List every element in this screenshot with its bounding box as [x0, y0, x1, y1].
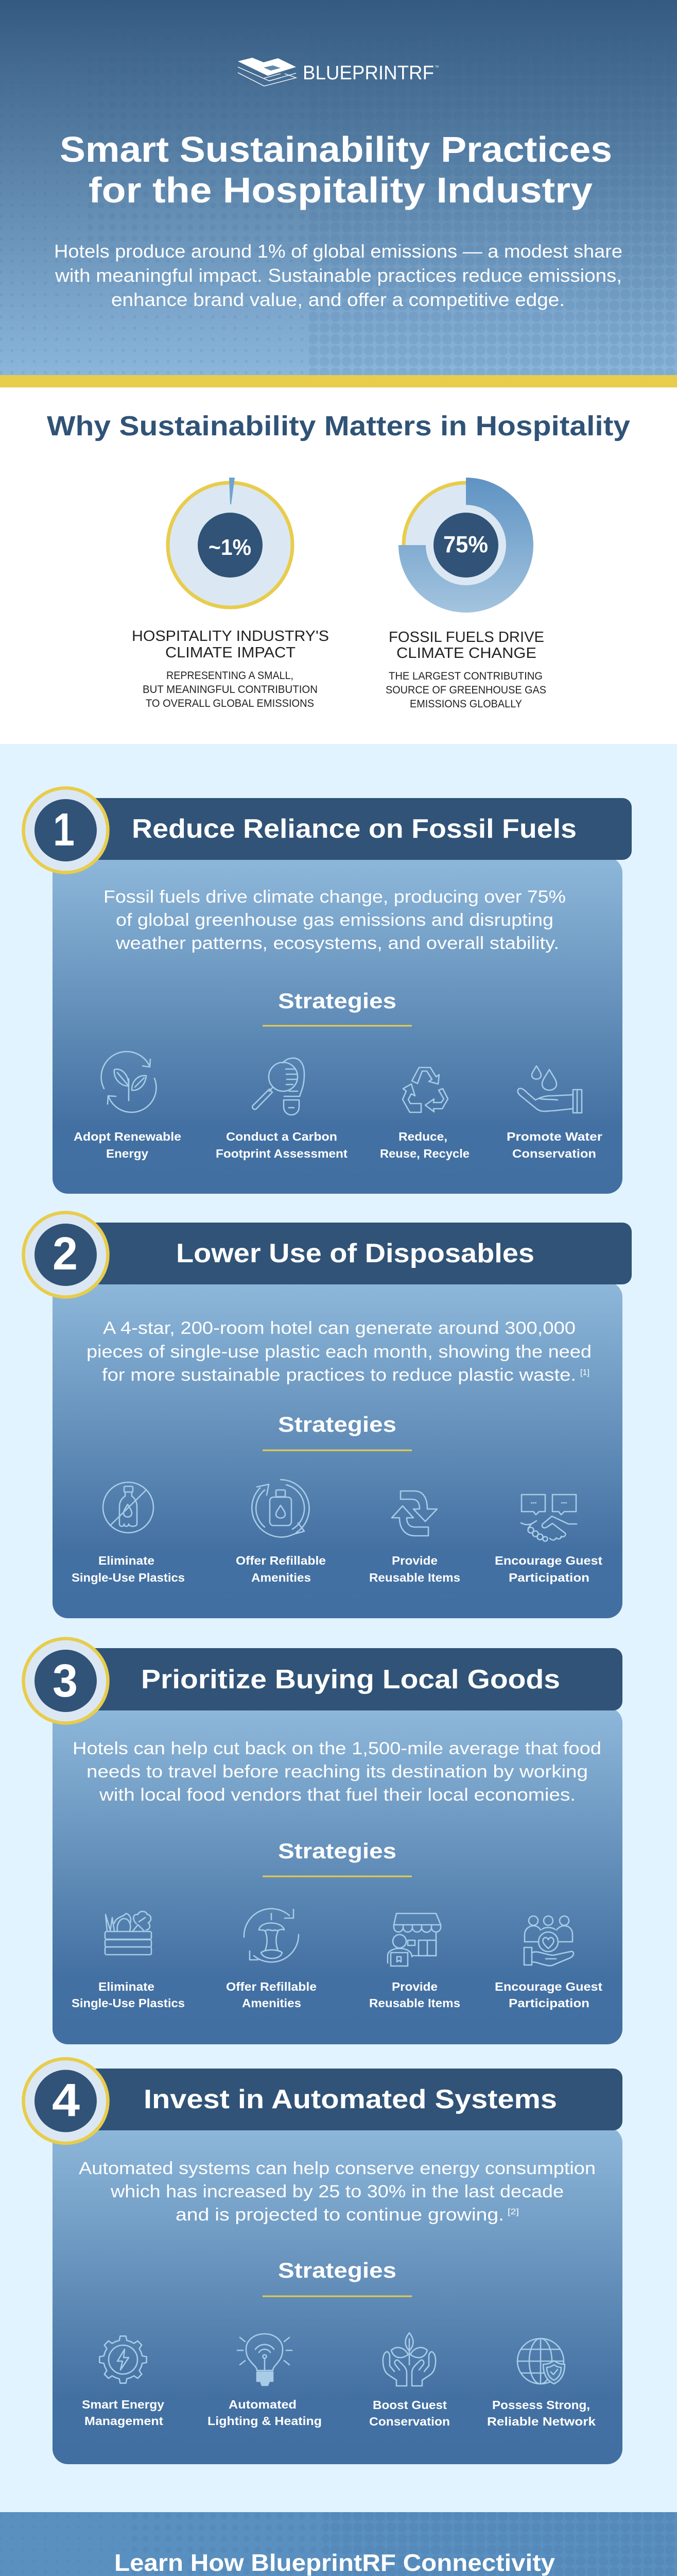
- heading: Reduce Reliance on Fossil Fuels: [132, 814, 577, 844]
- stat text: fossil fuels: EMISSIONS GLOBALLY: [410, 698, 522, 710]
- strategy labels: Management: [84, 2414, 163, 2428]
- header bar: [77, 798, 632, 860]
- section heading: Why Sustainability Matters in Hospitality: [47, 411, 630, 442]
- body text: and is projected to continue growing.: [176, 2205, 504, 2225]
- panel: call to action: [0, 2512, 677, 2576]
- strategy labels: Boost Guest: [373, 2398, 447, 2412]
- header bar: [77, 1648, 622, 1710]
- strategies heading: Strategies: [278, 2258, 396, 2282]
- icon: guest participation: [521, 1495, 577, 1541]
- stat text: fossil fuels: SOURCE OF GREENHOUSE GAS: [386, 684, 546, 696]
- body text: Hotels can help cut back on the 1,500-mile average that food: [73, 1739, 601, 1758]
- intro text: with meaningful impact. Sustainable practices reduce emissions,: [55, 265, 622, 286]
- body text: for more sustainable practices to reduce plastic waste.: [102, 1365, 576, 1385]
- stat text: climate impact: BUT MEANINGFUL CONTRIBUTION: [143, 684, 318, 696]
- body text: weather patterns, ecosystems, and overall stability.: [115, 934, 559, 953]
- strategy labels: Footprint Assessment: [216, 1147, 348, 1160]
- heading: Invest in Automated Systems: [144, 2084, 557, 2114]
- strategy labels: Conduct a Carbon: [226, 1130, 337, 1143]
- strategy labels: Reduce,: [398, 1130, 447, 1143]
- stat text: fossil fuels: THE LARGEST CONTRIBUTING: [389, 670, 543, 682]
- strategy labels: Possess Strong,: [492, 2398, 590, 2412]
- strategy labels: [72, 1554, 602, 1584]
- number badge: [24, 788, 108, 873]
- icon: local storefront: [388, 1913, 441, 1966]
- body text: [86, 1318, 592, 1385]
- icon: no plastic bottle: [103, 1482, 153, 1533]
- stat text: climate impact: [132, 628, 329, 709]
- donut chart: 75%: [398, 478, 533, 613]
- body text: with local food vendors that fuel their local economies.: [99, 1785, 576, 1805]
- number badge: 1: [53, 804, 75, 856]
- practices background: [0, 744, 677, 2512]
- strategy labels: Conservation: [369, 2415, 450, 2428]
- intro text: Hotels produce around 1% of global emissions — a modest share: [54, 241, 622, 262]
- body text: Automated systems can help conserve energy consumption: [79, 2159, 596, 2178]
- icon: apple core cycle: [244, 1909, 299, 1962]
- strategy labels: Provide: [392, 1980, 438, 1993]
- number badge: 4: [52, 2075, 80, 2126]
- body text: A 4-star, 200-room hotel can generate around 300,000: [103, 1318, 576, 1338]
- strategy labels: Single-Use Plastics: [72, 1996, 185, 2010]
- icon: recycle: [403, 1067, 448, 1112]
- card: [53, 857, 622, 1194]
- body text: Fossil fuels drive climate change, producing over 75%: [103, 887, 566, 907]
- strategy labels: Amenities: [242, 1996, 301, 2010]
- strategies heading: Strategies: [278, 1839, 396, 1863]
- strategy labels: Automated: [229, 2398, 297, 2411]
- panel: practice 2: [24, 1213, 632, 1618]
- body text: [1]: [580, 1368, 589, 1377]
- body text: [103, 887, 566, 953]
- strategies heading: Strategies: [278, 1412, 396, 1436]
- stat text: climate impact: CLIMATE IMPACT: [165, 645, 296, 661]
- number badge: 3: [53, 1655, 78, 1707]
- strategies heading: Strategies: [278, 989, 396, 1013]
- logo: [238, 58, 439, 86]
- panel: practice 4: [24, 2059, 622, 2464]
- number badge: [24, 1213, 108, 1297]
- logo: TM: [435, 65, 439, 69]
- icon: renewable energy: [101, 1052, 156, 1112]
- strategy labels: Reuse, Recycle: [380, 1147, 470, 1160]
- strategy labels: Conservation: [512, 1147, 596, 1160]
- strategy labels: Lighting & Heating: [207, 2414, 322, 2428]
- icon: footprint assessment: [252, 1058, 304, 1115]
- header bar: [77, 2069, 622, 2130]
- card: [53, 2127, 622, 2464]
- icon: conservation hands: [383, 2333, 436, 2386]
- body text: pieces of single-use plastic each month, showing the need: [86, 1342, 592, 1362]
- donut chart: 75%: 75%: [443, 531, 488, 557]
- strategy labels: [74, 1130, 602, 1160]
- logo: BLUEPRINTRF: [303, 62, 434, 84]
- strategy labels: Adopt Renewable: [74, 1130, 181, 1143]
- strategy labels: Promote Water: [507, 1130, 602, 1143]
- body text: needs to travel before reaching its destination by working: [86, 1762, 588, 1782]
- stat text: climate impact: REPRESENTING A SMALL,: [166, 670, 293, 682]
- strategy labels: Smart Energy: [82, 2398, 164, 2411]
- panel: why sustainability matters: [0, 387, 677, 744]
- number badge: [24, 2059, 108, 2143]
- strategy labels: Amenities: [251, 1571, 311, 1584]
- donut chart: 1%: [168, 478, 292, 607]
- body text: which has increased by 25 to 30% in the last decade: [110, 2182, 564, 2201]
- stat text: fossil fuels: [386, 629, 546, 710]
- icon: water conservation: [518, 1066, 582, 1113]
- icon: refillable amenity: [252, 1480, 309, 1537]
- body text: [2]: [508, 2208, 519, 2216]
- strategy labels: Participation: [509, 1571, 589, 1584]
- header bar: [77, 1223, 632, 1284]
- stat text: fossil fuels: CLIMATE CHANGE: [396, 645, 536, 662]
- strategy labels: Participation: [509, 1996, 589, 2010]
- donut chart: 1%: ~1%: [209, 535, 251, 560]
- stat text: fossil fuels: FOSSIL FUELS DRIVE: [389, 629, 544, 646]
- panel: practice 3: [24, 1638, 622, 2044]
- stat text: climate impact: TO OVERALL GLOBAL EMISSIONS: [146, 698, 314, 709]
- icon: reusable arrows: [392, 1491, 437, 1536]
- icon: secure network globe: [517, 2338, 565, 2384]
- heading: Prioritize Buying Local Goods: [141, 1665, 560, 1694]
- cta heading: Learn How BlueprintRF Connectivity: [114, 2549, 555, 2576]
- strategy labels: Reliable Network: [487, 2415, 596, 2428]
- stat text: climate impact: HOSPITALITY INDUSTRY'S: [132, 628, 329, 645]
- yellow divider band: [0, 375, 677, 387]
- heading: Lower Use of Disposables: [176, 1239, 534, 1268]
- strategy labels: Offer Refillable: [226, 1980, 317, 1993]
- icon: community care: [524, 1916, 574, 1965]
- icon: smart energy gear: [99, 2336, 147, 2383]
- card: [53, 1282, 622, 1618]
- strategy labels: Eliminate: [98, 1980, 154, 1993]
- body text: [73, 1739, 601, 1805]
- icon: produce crate: [105, 1911, 151, 1955]
- body text: of global greenhouse gas emissions and disrupting: [116, 910, 553, 930]
- strategy labels: Eliminate: [98, 1554, 154, 1567]
- strategy labels: Reusable Items: [369, 1571, 460, 1584]
- title: for the Hospitality Industry: [89, 170, 593, 210]
- intro text: enhance brand value, and offer a competitive edge.: [111, 289, 565, 310]
- strategy labels: [72, 1980, 602, 2010]
- title: Smart Sustainability Practices: [60, 129, 612, 170]
- strategy labels: [82, 2398, 596, 2428]
- body text: [79, 2159, 596, 2225]
- strategy labels: Single-Use Plastics: [72, 1571, 185, 1584]
- number badge: [24, 1638, 108, 1723]
- strategy labels: Reusable Items: [369, 1996, 460, 2010]
- intro text: [54, 241, 622, 310]
- number badge: 2: [53, 1228, 78, 1280]
- strategy labels: Encourage Guest: [495, 1980, 602, 1993]
- strategy labels: Encourage Guest: [495, 1554, 602, 1567]
- header banner: [0, 0, 677, 375]
- card: [53, 1707, 622, 2044]
- panel: practice 1: [24, 788, 632, 1194]
- strategy labels: Provide: [392, 1554, 438, 1567]
- title: [60, 129, 612, 210]
- icon: automated light bulb: [237, 2334, 292, 2385]
- strategy labels: Offer Refillable: [236, 1554, 326, 1567]
- strategy labels: Energy: [106, 1147, 148, 1160]
